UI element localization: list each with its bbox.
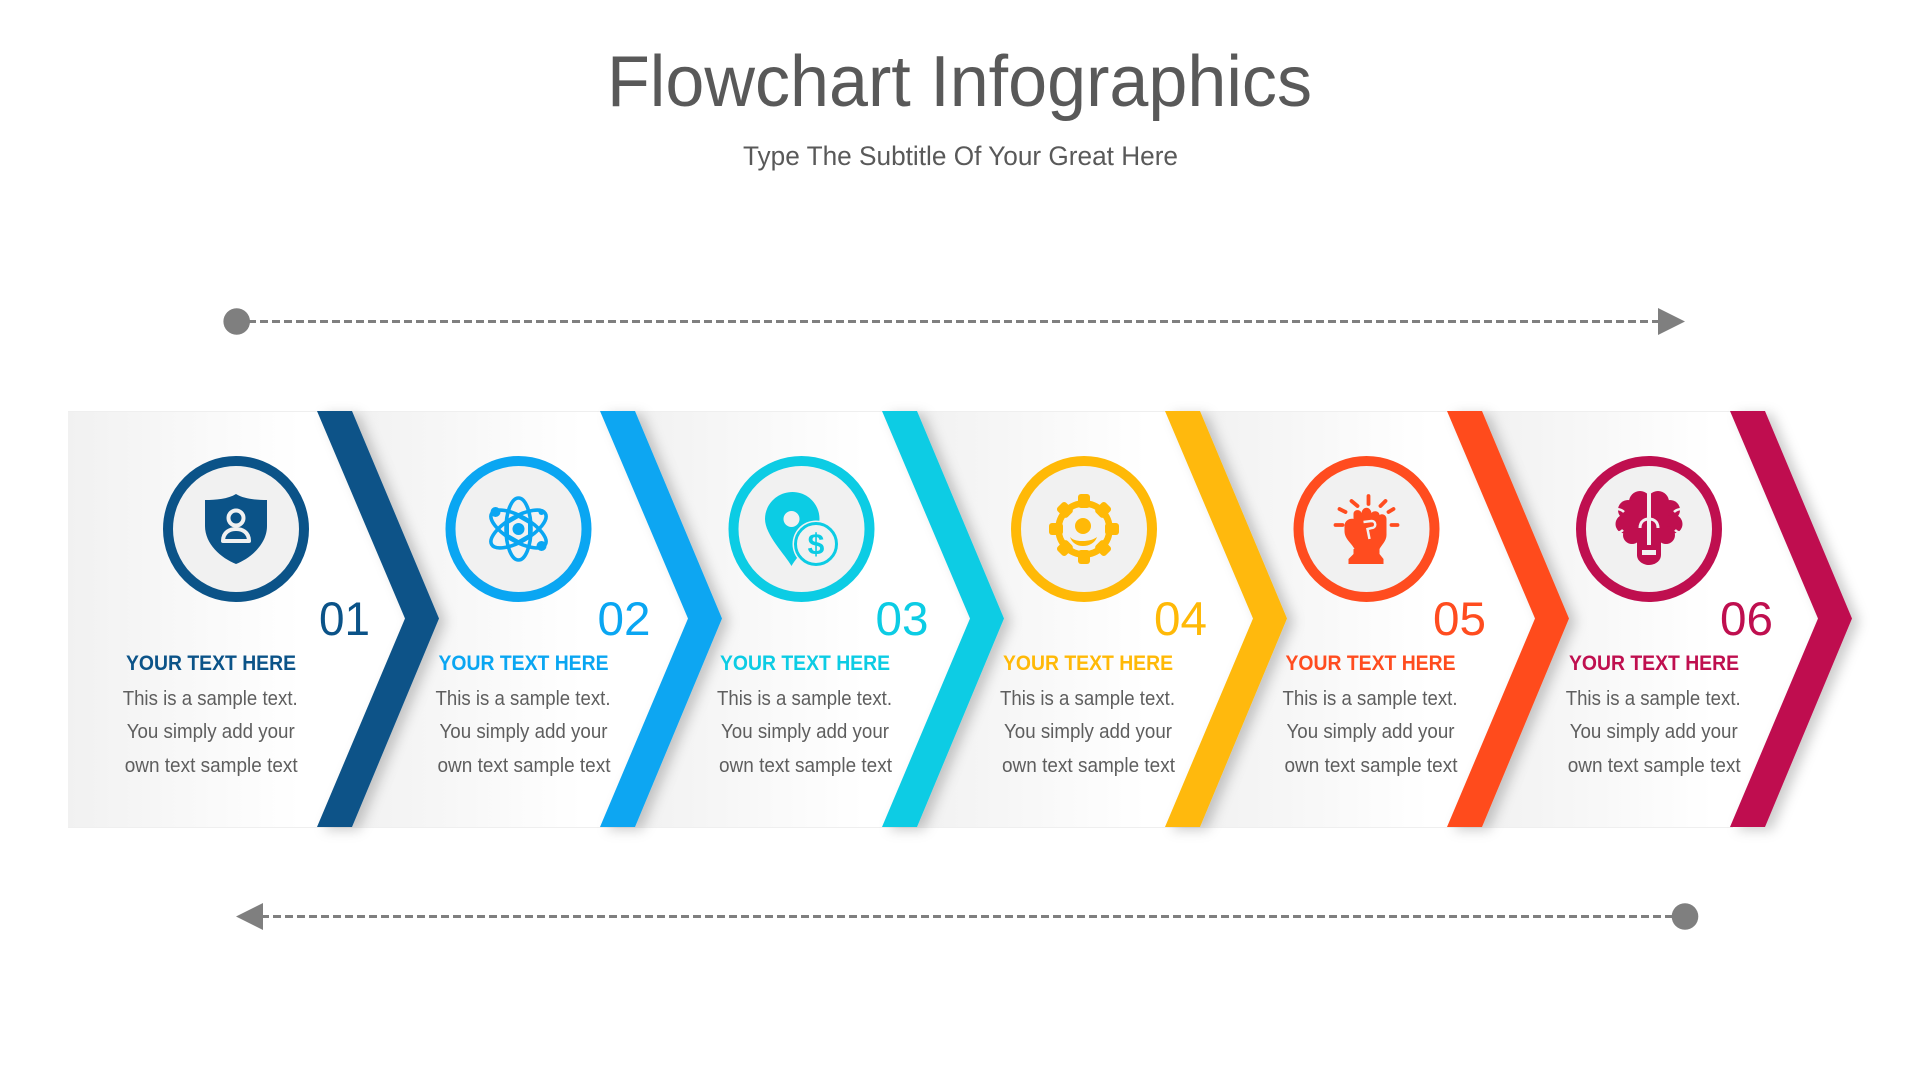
step 4 body text: [1000, 687, 1175, 777]
step 5 body text: This is a sample text.: [1282, 687, 1458, 710]
chevron 6: [1730, 411, 1852, 827]
top dashed arrow: [223, 308, 1685, 335]
step 6 heading: YOUR TEXT HERE: [1569, 651, 1739, 675]
step 1 body text: This is a sample text.: [123, 687, 298, 710]
step 4 body text: own text sample text: [1002, 754, 1175, 777]
subtitle: Type The Subtitle Of Your Great Here: [743, 141, 1178, 171]
step 5 heading: YOUR TEXT HERE: [1286, 651, 1456, 675]
step 3 body text: own text sample text: [719, 754, 892, 777]
step 3 number: 03: [876, 592, 928, 645]
step 6 body text: [1566, 687, 1741, 777]
step 2 body text: You simply add your: [440, 720, 608, 743]
step 1 body text: own text sample text: [125, 754, 298, 777]
step 2 heading: YOUR TEXT HERE: [438, 651, 608, 675]
chevron 3: [882, 411, 1004, 827]
step 5 body text: own text sample text: [1284, 754, 1458, 777]
step 5 body text: [1282, 687, 1458, 777]
step 6 body text: own text sample text: [1568, 754, 1741, 777]
step 3 body text: You simply add your: [721, 720, 889, 743]
step 4 body text: This is a sample text.: [1000, 687, 1175, 710]
step 1 body text: [123, 687, 298, 777]
chevron 5: [1447, 411, 1569, 827]
step 4 body text: You simply add your: [1004, 720, 1172, 743]
step 3 body text: [717, 687, 892, 777]
step 4 icon: gear with person: [1016, 461, 1152, 597]
step 1 number: 01: [319, 592, 370, 645]
step 2 body text: This is a sample text.: [436, 687, 610, 710]
step 3 heading: YOUR TEXT HERE: [720, 651, 890, 675]
step 1 icon: shield with person: [168, 461, 304, 597]
chevron 4: [1165, 411, 1287, 827]
step 6 icon: brain light bulb: [1581, 461, 1717, 597]
step 3 icon: location pin with dollar: [734, 461, 870, 597]
step 5 icon: raised fist: [1298, 461, 1434, 597]
step 2 number: 02: [598, 592, 650, 645]
step 4 number: 04: [1154, 592, 1207, 645]
chevron 2: [600, 411, 722, 827]
step 5 body text: You simply add your: [1286, 720, 1455, 743]
step 2 body text: [436, 687, 611, 777]
panel backgrounds: [68, 411, 1821, 828]
step 2 body text: own text sample text: [438, 754, 611, 777]
step 2 icon: atom: [450, 461, 586, 597]
chevron 1: [317, 411, 439, 827]
step 3 body text: This is a sample text.: [717, 687, 892, 710]
step 6 number: 06: [1720, 592, 1773, 645]
step 5 number: 05: [1433, 592, 1486, 645]
bottom dashed arrow: [236, 903, 1698, 930]
step 1 body text: You simply add your: [127, 720, 295, 743]
step 1 heading: YOUR TEXT HERE: [126, 651, 296, 675]
step 6 body text: You simply add your: [1570, 720, 1738, 743]
step 4 heading: YOUR TEXT HERE: [1003, 651, 1173, 675]
step 6 body text: This is a sample text.: [1566, 687, 1741, 710]
step 3 icon: location pin with dollar: $: [808, 528, 825, 562]
title: Flowchart Infographics: [607, 42, 1312, 122]
